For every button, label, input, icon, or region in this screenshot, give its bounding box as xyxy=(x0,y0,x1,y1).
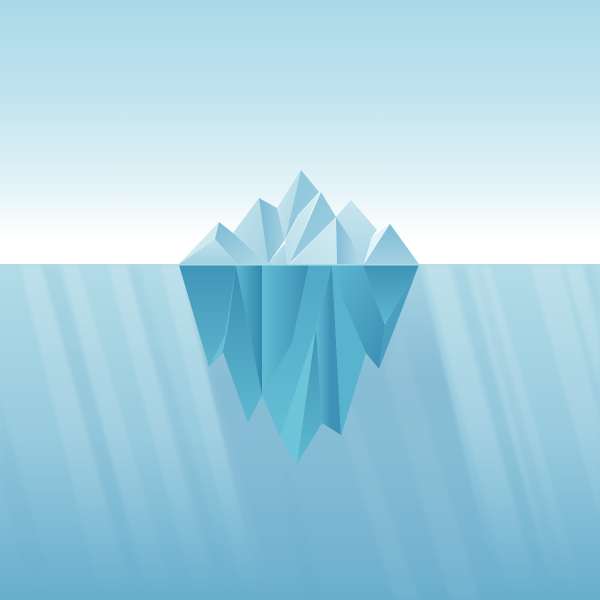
iceberg below water xyxy=(179,264,419,464)
right peak facets xyxy=(336,200,377,264)
light rays in water xyxy=(0,265,600,600)
waterline highlight xyxy=(179,264,419,266)
left peak facets xyxy=(179,239,237,264)
right-centre peak facets xyxy=(285,193,319,264)
ice facet: right column xyxy=(332,265,385,369)
ice facet: centre left xyxy=(262,265,309,395)
tallest peak facets xyxy=(277,170,301,240)
sky background xyxy=(0,0,600,265)
second peak facets xyxy=(233,198,268,264)
sea background xyxy=(0,264,600,600)
iceberg above water xyxy=(179,170,419,264)
ice facet: far left xyxy=(179,265,236,367)
ice facet: far right xyxy=(363,265,419,325)
ice facet: left lower xyxy=(223,265,262,423)
ice facet: inner column xyxy=(316,265,341,435)
ice facet: centre xyxy=(262,265,332,464)
iceberg shadow under water xyxy=(180,265,510,600)
